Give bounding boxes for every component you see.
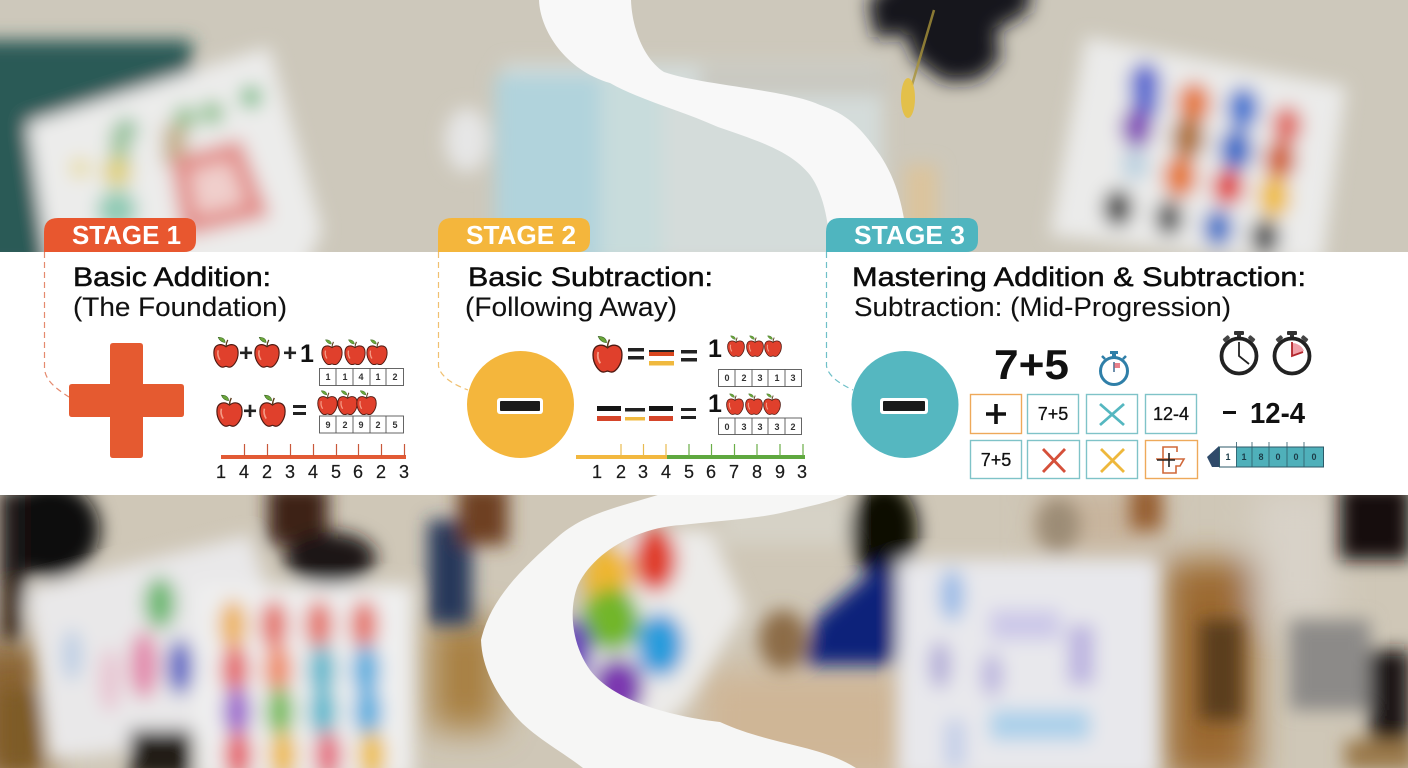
number boxes row 2: 9 [358, 420, 364, 430]
number strip [1207, 442, 1324, 467]
number line 2: 7 [729, 462, 739, 482]
stage 1 heading [73, 262, 287, 322]
number strip: 8 [1258, 452, 1264, 462]
stage 2 connector [438, 252, 468, 390]
number boxes stage 2 row 1: 2 [741, 373, 747, 383]
number strip: 0 [1293, 452, 1299, 462]
panel: stage 1 [44, 218, 409, 482]
number boxes row 1: 1 [342, 372, 348, 382]
number line 1: 2 [262, 462, 272, 482]
number line 1: 4 [308, 462, 318, 482]
number line 1: 6 [353, 462, 363, 482]
stage 3 badge [826, 218, 978, 252]
stage 2 badge [438, 218, 590, 252]
icon: minus circle teal [852, 351, 958, 458]
background: blurred classroom bottom [0, 482, 1408, 768]
bar equation row 2: 1 [708, 390, 722, 418]
icon: black stopwatch with red sector [1274, 331, 1310, 374]
bar equation row 2 [597, 390, 780, 421]
stage 1 badge: STAGE 1 [72, 220, 181, 250]
answer tile grid [970, 394, 1198, 478]
number line 2 [576, 444, 807, 482]
answer tile grid: 7+5 [981, 450, 1011, 470]
number line 2: 3 [638, 462, 648, 482]
number line 1: 4 [239, 462, 249, 482]
number boxes stage 2 row 1: 3 [757, 373, 763, 383]
number boxes row 1: 2 [392, 372, 398, 382]
apple addition row 1: + [239, 340, 253, 367]
icon: small stopwatch [1100, 351, 1128, 384]
number boxes stage 2 row 2: 2 [790, 422, 796, 432]
number line 1: 1 [216, 462, 226, 482]
expression 12-4: 12-4 [1250, 398, 1305, 430]
number strip: 0 [1275, 452, 1281, 462]
stage 3 badge: STAGE 3 [854, 220, 965, 250]
apple addition row 1: 1 [300, 340, 314, 368]
icon: minus circle yellow [467, 351, 574, 458]
number line 2: 8 [752, 462, 762, 482]
number line 2: 3 [797, 462, 807, 482]
number boxes stage 2 row 2 [718, 418, 802, 434]
icon: black stopwatch [1222, 331, 1256, 374]
number line 2: 5 [684, 462, 694, 482]
number line 1: 5 [331, 462, 341, 482]
number boxes stage 2 row 2: 3 [741, 422, 747, 432]
number boxes row 2 [320, 416, 404, 433]
number boxes row 1: 1 [375, 372, 381, 382]
number line 2: 2 [616, 462, 626, 482]
stage 1 connector [44, 252, 69, 397]
graduation cap [868, 0, 1032, 118]
sum 7+5: 7+5 [994, 341, 1069, 388]
white content band [0, 252, 1408, 495]
number line 1: 3 [399, 462, 409, 482]
number strip: 1 [1225, 452, 1231, 462]
winding path bottom [481, 490, 858, 768]
apple addition row 2: + [243, 398, 257, 425]
stage 3 heading: Mastering Addition & Subtraction: [852, 262, 1306, 292]
number line 1: 2 [376, 462, 386, 482]
panel: stage 3 [826, 218, 1324, 478]
stage 1 heading: (The Foundation) [73, 292, 287, 322]
stage 3 heading: Subtraction: (Mid-Progression) [854, 292, 1231, 322]
number boxes stage 2 row 2: 0 [724, 422, 730, 432]
number line 2: 6 [706, 462, 716, 482]
number boxes stage 2 row 2: 3 [757, 422, 763, 432]
number boxes row 1 [320, 368, 404, 386]
number strip: 1 [1241, 452, 1247, 462]
apple addition row 1 [214, 337, 387, 368]
number boxes row 1: 1 [325, 372, 331, 382]
apple equation row 1 [593, 335, 781, 372]
stage 2 heading [465, 262, 713, 322]
answer tile grid: 7+5 [1038, 404, 1068, 424]
apple addition row 1: + [283, 340, 297, 367]
number boxes row 2: 2 [375, 420, 381, 430]
number boxes row 2: 2 [342, 420, 348, 430]
number boxes row 2: 5 [392, 420, 398, 430]
number line 2: 4 [661, 462, 671, 482]
apple addition row 2 [217, 391, 376, 426]
number boxes stage 2 row 2: 3 [774, 422, 780, 432]
icon: plus [69, 343, 184, 458]
number strip: 0 [1311, 452, 1317, 462]
stage 1 heading: Basic Addition: [73, 262, 271, 292]
number line 2: 9 [775, 462, 785, 482]
number line 2: 1 [592, 462, 602, 482]
background: blurred classroom top [0, 0, 1408, 280]
stage 3 heading [852, 262, 1306, 322]
number boxes row 1: 4 [358, 372, 364, 382]
stage 2 badge: STAGE 2 [466, 220, 576, 250]
winding path top [539, 0, 908, 256]
number line 1: 3 [285, 462, 295, 482]
number boxes stage 2 row 1: 3 [790, 373, 796, 383]
panel: stage 2 [438, 218, 807, 482]
stage 1 badge [44, 218, 196, 252]
number boxes stage 2 row 1 [718, 370, 802, 386]
number boxes stage 2 row 1: 0 [724, 373, 730, 383]
stage 2 heading: (Following Away) [465, 292, 677, 322]
number boxes stage 2 row 1: 1 [774, 373, 780, 383]
answer tile grid: 12-4 [1153, 404, 1189, 424]
stage 2 heading: Basic Subtraction: [468, 262, 713, 292]
apple equation row 1: 1 [708, 335, 722, 363]
number line 1 [216, 444, 409, 482]
number boxes row 2: 9 [325, 420, 331, 430]
expression 12-4 [1223, 398, 1305, 430]
stage 3 connector [826, 252, 853, 390]
